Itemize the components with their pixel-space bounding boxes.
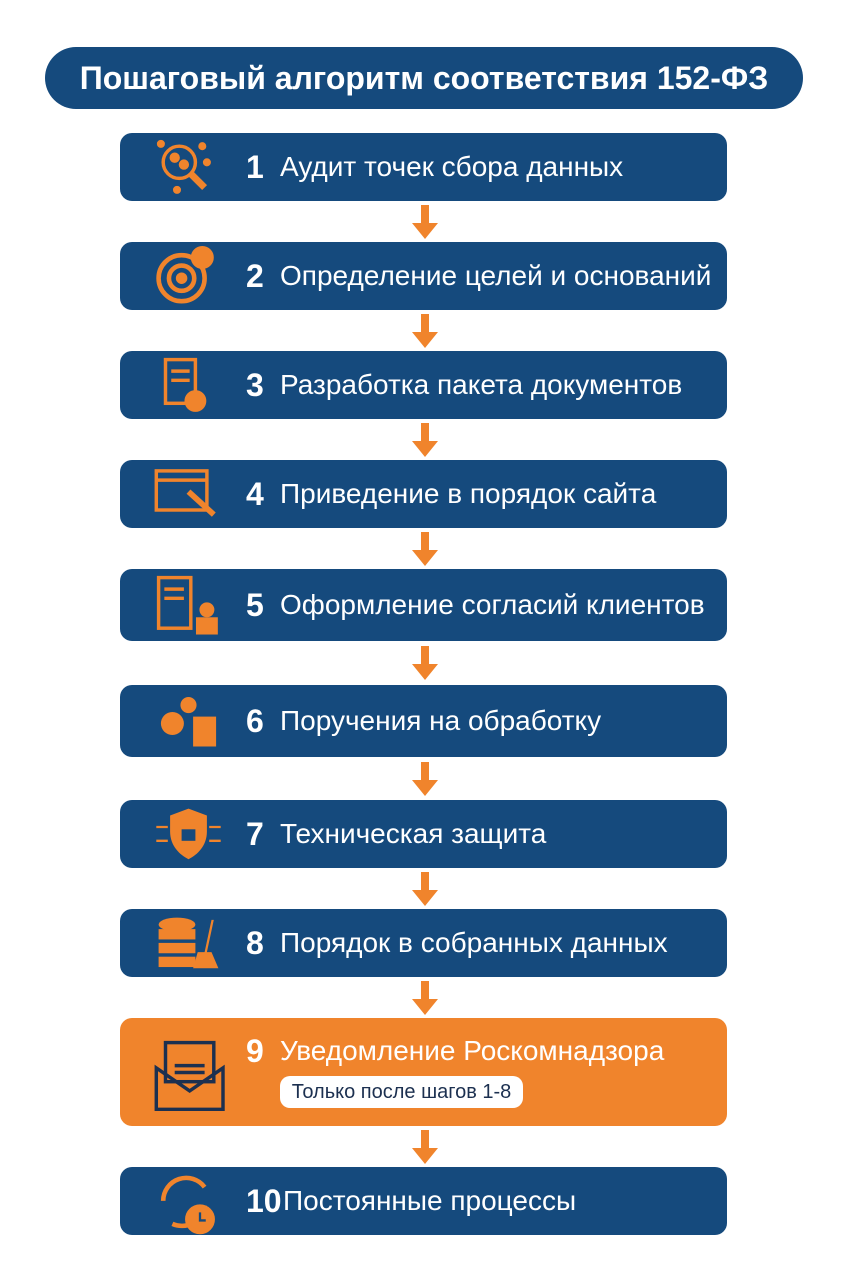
icon: consent: [156, 576, 218, 635]
icon: shield lock: [156, 808, 221, 860]
step 8: [120, 909, 727, 977]
arrow: [412, 762, 438, 796]
icon: target: [156, 246, 214, 304]
step 2: Определение целей и оснований: [280, 260, 711, 291]
step 3: Разработка пакета документов: [280, 369, 682, 400]
step 1: Аудит точек сбора данных: [280, 151, 623, 182]
step 2: [120, 242, 727, 310]
title: Пошаговый алгоритм соответствия 152-ФЗ: [80, 60, 768, 96]
step 10: [120, 1167, 727, 1235]
icon: gears document: [160, 697, 216, 746]
callout pill: [280, 1076, 523, 1108]
step 9 highlighted: [120, 1018, 727, 1126]
arrow: [412, 872, 438, 906]
step 1: [120, 133, 727, 201]
icon: cycle clock: [160, 1176, 215, 1234]
step 5: [120, 569, 727, 641]
label 9: 9: [246, 1033, 264, 1069]
step 7: [120, 800, 727, 868]
step 4: [120, 460, 727, 528]
label 2: 2: [246, 258, 264, 294]
step 10: Постоянные процессы: [283, 1185, 576, 1216]
icon: database broom: [158, 918, 218, 968]
label 1: 1: [246, 149, 264, 185]
step 7: Техническая защита: [280, 818, 546, 849]
label 3: 3: [246, 367, 264, 403]
label 10: 10: [246, 1183, 282, 1219]
arrow: [412, 646, 438, 680]
arrow: [412, 423, 438, 457]
icon: browser wrench: [154, 469, 216, 517]
arrow: [412, 981, 438, 1015]
arrow: [412, 314, 438, 348]
label 5: 5: [246, 587, 264, 623]
arrow: [412, 205, 438, 239]
step 3: [120, 351, 727, 419]
icon: envelope: [154, 1040, 225, 1111]
label 4: 4: [246, 476, 264, 512]
step 6: Поручения на обработку: [280, 705, 601, 736]
title: [45, 47, 803, 109]
arrow: [412, 1130, 438, 1164]
label 7: 7: [246, 816, 264, 852]
step 9 highlighted: Уведомление Роскомнадзора: [280, 1035, 664, 1066]
icon: documents: [164, 358, 206, 412]
icon: magnifier: [156, 140, 211, 194]
step 5: Оформление согласий клиентов: [280, 589, 705, 620]
callout pill: Только после шагов 1-8: [292, 1081, 511, 1103]
step 6: [120, 685, 727, 757]
label 6: 6: [246, 703, 264, 739]
arrow: [412, 532, 438, 566]
step 8: Порядок в собранных данных: [280, 927, 668, 958]
step 4: Приведение в порядок сайта: [280, 478, 656, 509]
label 8: 8: [246, 925, 264, 961]
